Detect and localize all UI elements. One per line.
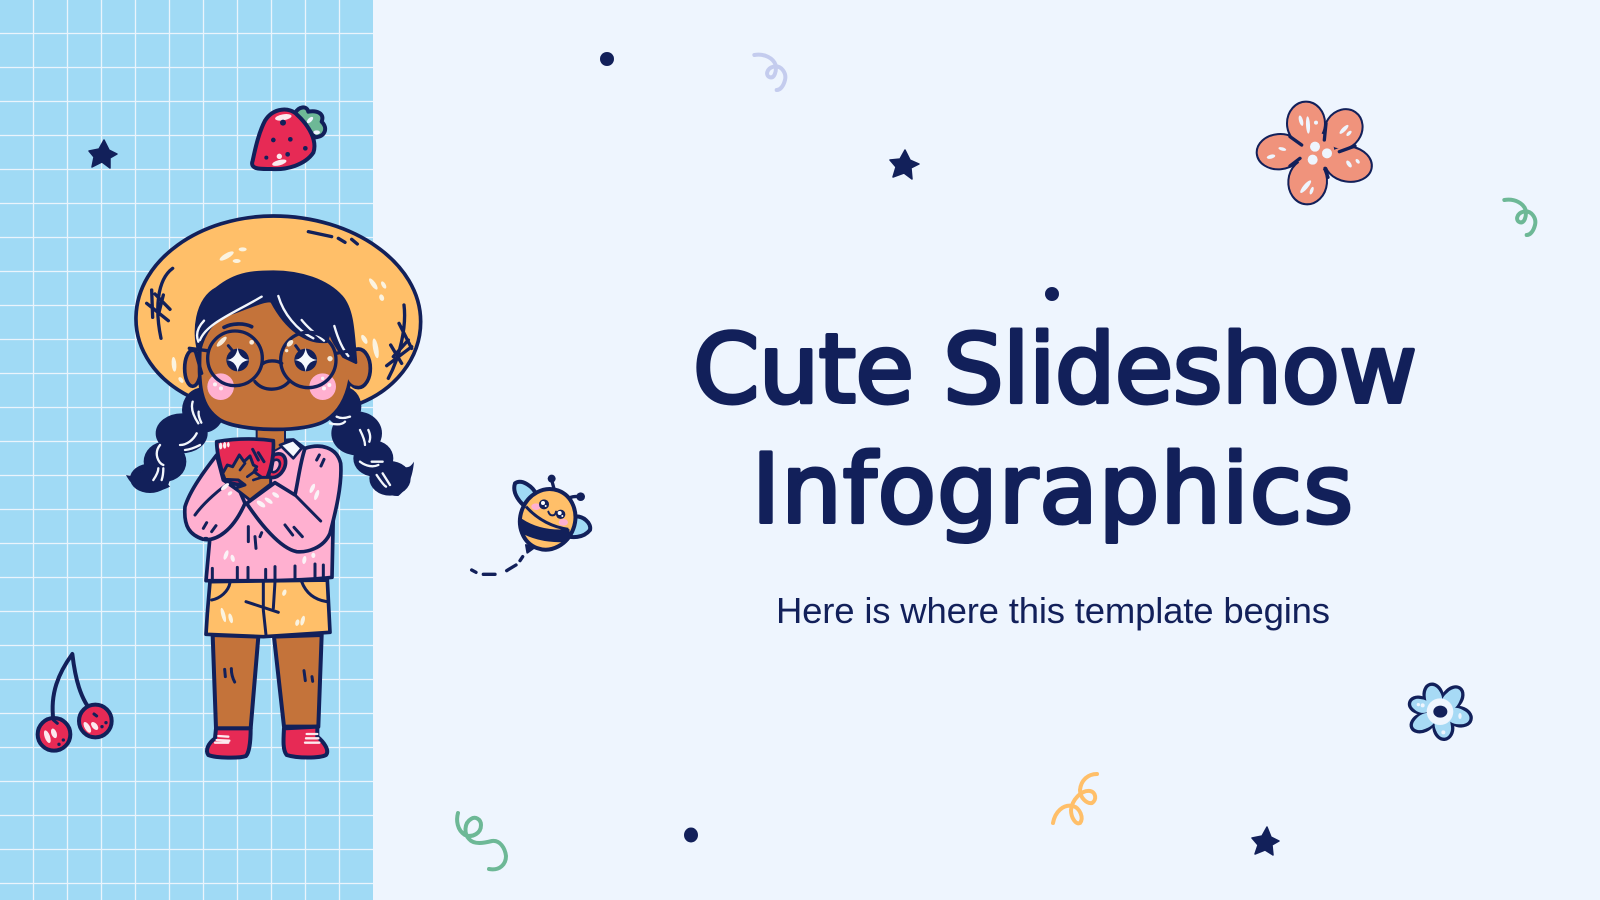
- icon: green squiggle top right: [1504, 200, 1535, 235]
- icon: salmon flower: [1256, 103, 1374, 205]
- icon: blue flower: [1408, 682, 1473, 741]
- icon: dot top: [600, 52, 614, 66]
- mug, arms and hands: [185, 439, 341, 552]
- icon: bee with dashed flight trail: [472, 475, 590, 574]
- icon: dot bottom: [684, 828, 698, 842]
- panel: blue grid background: [0, 0, 373, 900]
- hat: [136, 216, 421, 403]
- braids: [126, 387, 414, 496]
- icon: green squiggle bottom: [457, 813, 506, 869]
- title: [693, 315, 1417, 545]
- icon: star on grid: [89, 140, 117, 168]
- legs and shoes: [207, 635, 327, 758]
- icon: dot above title: [1045, 287, 1059, 301]
- title: Cute Slideshow: [693, 315, 1417, 425]
- character: girl with straw hat: [126, 216, 421, 758]
- icon: orange squiggle: [1053, 774, 1097, 823]
- sweater torso: [206, 440, 333, 581]
- icon: strawberry: [252, 107, 325, 169]
- icon: cherries: [38, 654, 112, 751]
- icon: star top centre: [890, 150, 919, 179]
- icon: star bottom right: [1252, 827, 1279, 855]
- subtitle: Here is where this template begins: [776, 590, 1330, 631]
- title: Infographics: [752, 435, 1353, 545]
- icon: lavender squiggle: [754, 55, 785, 90]
- neck, head and hair: [185, 272, 370, 453]
- shorts: [206, 580, 330, 637]
